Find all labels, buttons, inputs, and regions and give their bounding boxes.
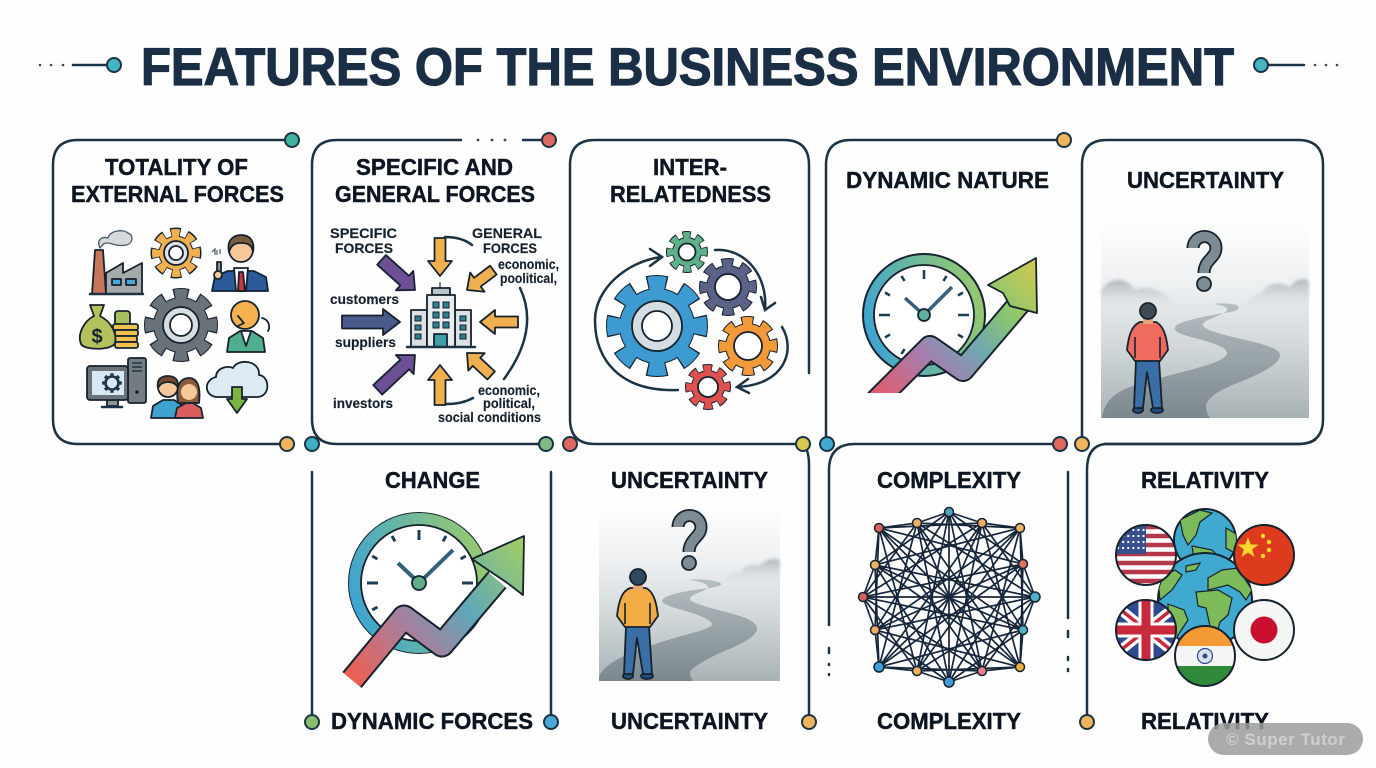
labels: general forces: economic, <box>478 382 540 398</box>
panel: inter-relatedness <box>563 140 809 451</box>
icon: red gear <box>690 369 726 405</box>
heading: TOTALITY OF <box>105 154 248 180</box>
icon: clock with rising arrow <box>862 253 1037 405</box>
labels: specific forces <box>330 225 399 411</box>
icon: navy gear <box>705 264 751 310</box>
heading <box>71 154 284 207</box>
icon: large globe <box>1158 553 1252 650</box>
icon: China flag <box>1234 525 1294 585</box>
arrow: general forces top <box>428 238 452 276</box>
icon: small globe <box>1173 508 1237 560</box>
heading: GENERAL FORCES <box>335 181 535 207</box>
watermark: © Super Tutor <box>1226 730 1345 749</box>
arrow: investors <box>369 345 424 399</box>
icon: desktop computer <box>87 358 146 407</box>
panel: dynamic nature <box>820 133 1071 451</box>
icon: India flag <box>1175 626 1235 686</box>
panel: complexity <box>829 437 1068 734</box>
watermark <box>1208 723 1363 755</box>
heading: EXTERNAL FORCES <box>71 181 284 207</box>
icon: person in orange <box>617 569 658 679</box>
labels: general forces: GENERAL <box>472 225 542 241</box>
heading: COMPLEXITY <box>877 467 1021 493</box>
arrow: general forces right <box>480 310 518 334</box>
icon: green gear <box>671 236 703 268</box>
labels: general forces <box>438 225 559 425</box>
title ornament right <box>1254 58 1338 72</box>
arrow: specific forces top-left <box>373 250 424 300</box>
panel: uncertainty <box>1075 140 1323 451</box>
labels: specific forces: suppliers <box>335 334 396 350</box>
network diagram <box>858 508 1040 687</box>
labels: general forces: social conditions <box>438 409 541 425</box>
heading: RELATIVITY <box>1141 467 1269 493</box>
heading: INTER- <box>653 154 727 180</box>
heading: UNCERTAINTY <box>611 467 768 493</box>
labels: general forces: poolitical, <box>500 270 557 286</box>
heading: DYNAMIC NATURE <box>846 167 1049 193</box>
cycle arrows <box>595 249 788 393</box>
icon: central grey gear <box>152 296 210 354</box>
arrow: general forces bottom <box>428 365 452 405</box>
labels: general forces: political, <box>483 395 535 411</box>
labels: general forces: FORCES <box>483 240 537 256</box>
heading: SPECIFIC AND <box>356 154 513 180</box>
label: DYNAMIC FORCES <box>331 708 533 734</box>
icon: clock with rising arrow <box>348 512 524 680</box>
label: RELATIVITY <box>1141 708 1269 734</box>
illustration: foggy road <box>1101 225 1309 418</box>
panel: uncertainty second <box>599 437 816 734</box>
panel: relativity <box>1080 440 1315 734</box>
heading: RELATEDNESS <box>610 181 771 207</box>
arrow: general forces bottom-right <box>459 344 499 384</box>
labels: specific forces: customers <box>330 291 399 307</box>
labels: specific forces: investors <box>333 395 393 411</box>
connector curves <box>445 237 527 404</box>
panel: totality of external forces <box>53 133 299 451</box>
icon: woman <box>227 301 269 352</box>
icon: US flag <box>1116 525 1176 585</box>
icon: Japan flag <box>1234 600 1294 660</box>
icon: question mark <box>1193 236 1216 291</box>
label: COMPLEXITY <box>877 708 1021 734</box>
heading <box>335 154 535 207</box>
icon: two people <box>151 376 203 418</box>
icon: cloud download <box>207 362 267 413</box>
icon: businessman <box>212 235 268 291</box>
icon: question mark <box>678 516 701 570</box>
heading: UNCERTAINTY <box>1127 167 1284 193</box>
arrow: general forces top-right <box>460 261 501 300</box>
icon: orange gear <box>724 322 772 370</box>
arrow: customers <box>342 309 400 335</box>
icon: UK flag <box>1116 600 1176 660</box>
panel: change and dynamic forces <box>305 467 558 734</box>
icon: office building <box>407 282 475 347</box>
labels: general forces: economic, <box>498 256 559 272</box>
title ornament left <box>39 58 121 72</box>
label: UNCERTAINTY <box>611 708 768 734</box>
icon: blue gear <box>616 285 698 367</box>
title: FEATURES OF THE BUSINESS ENVIRONMENT <box>141 38 1234 97</box>
heading <box>610 154 771 207</box>
heading: CHANGE <box>385 467 480 493</box>
icon: factory <box>90 231 143 294</box>
icon: money bag and coins <box>80 305 138 349</box>
icon: money bag and coins: $ <box>91 326 103 348</box>
panel: specific and general forces <box>305 133 559 451</box>
illustration: foggy road <box>599 508 780 681</box>
icon: orange gear <box>157 234 195 272</box>
labels: specific forces: SPECIFIC <box>330 225 397 241</box>
icon: person in red <box>1127 303 1168 413</box>
labels: specific forces: FORCES <box>335 240 393 256</box>
